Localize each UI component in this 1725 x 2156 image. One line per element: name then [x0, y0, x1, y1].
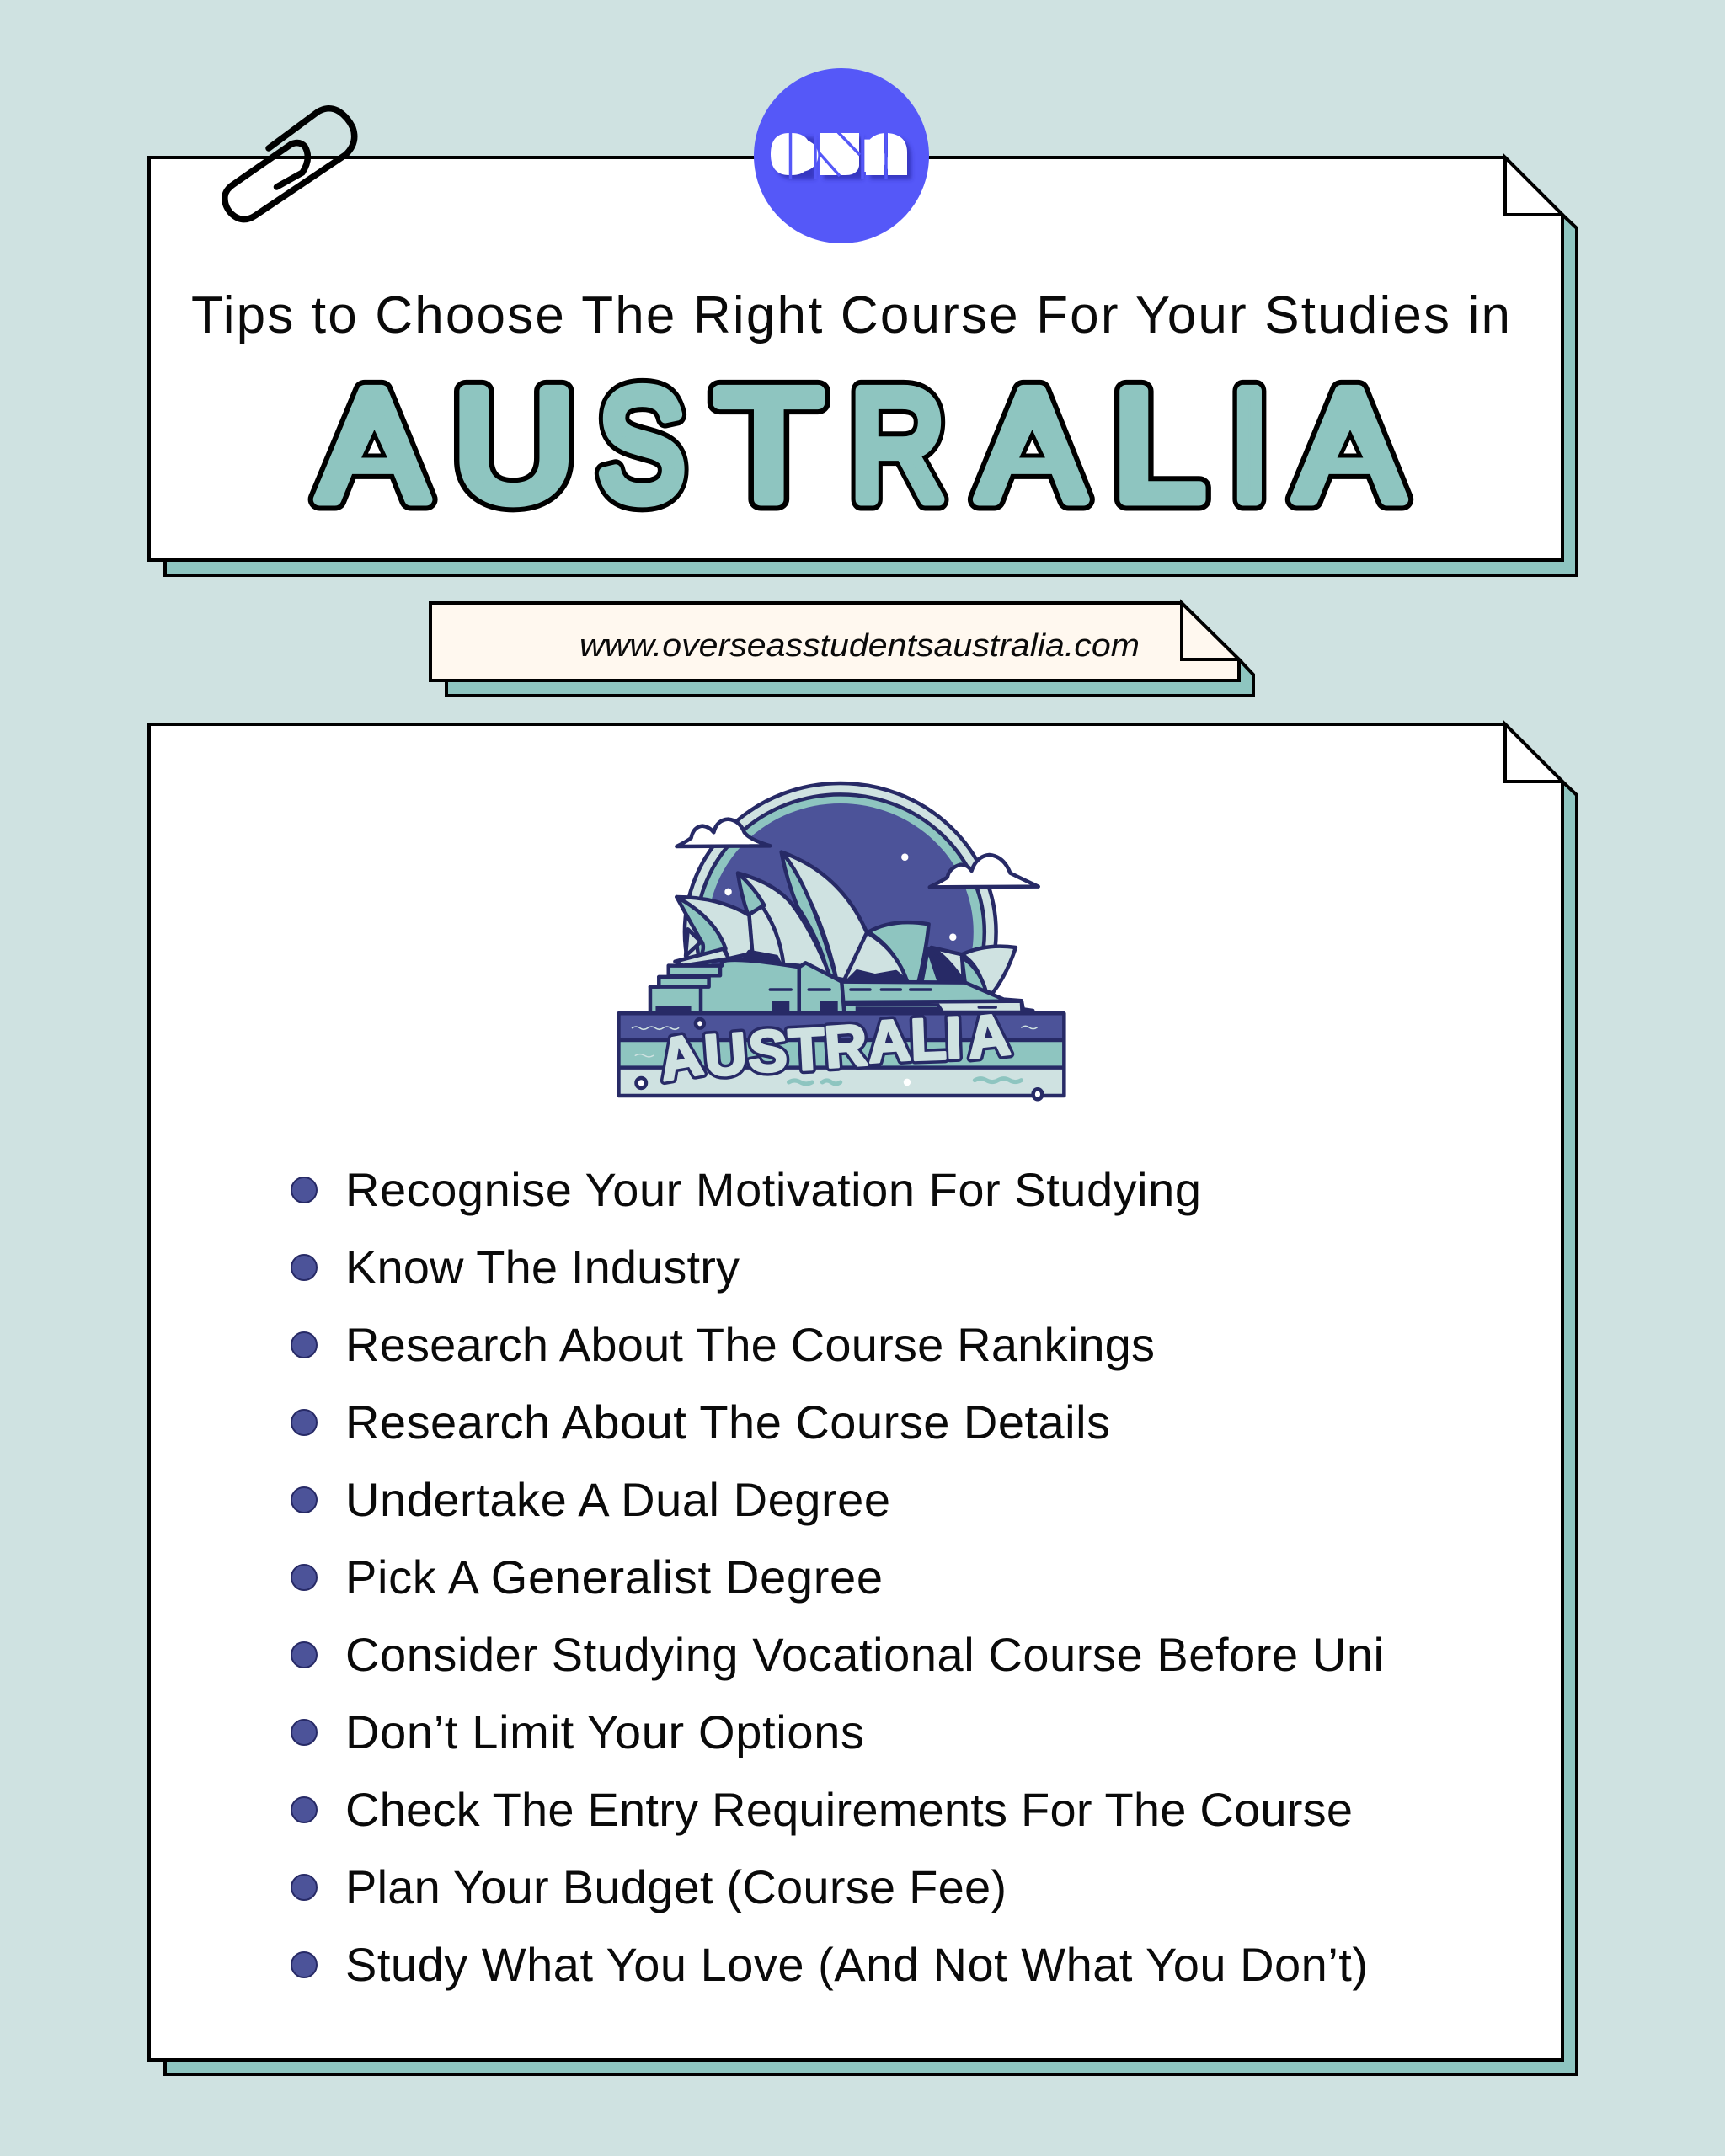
title: AUSTRALIA: I [1230, 357, 1269, 533]
title: AUSTRALIA: A [319, 358, 426, 534]
title: AUSTRALIA: S [598, 357, 686, 533]
tip 6: Pick A Generalist Degree [345, 1550, 883, 1604]
building dashes [770, 990, 996, 1007]
water bands [618, 1013, 1064, 1096]
title: AUSTRALIA: R [850, 357, 945, 533]
title: AUSTRALIA: T [716, 357, 822, 533]
badge lettering [654, 1001, 1013, 1093]
letter A counters [365, 435, 1359, 456]
badge lettering: R [822, 1011, 869, 1081]
title: AUSTRALIA: L [1113, 356, 1204, 533]
badge lettering: S [748, 1018, 788, 1084]
tip 10: Plan Your Budget (Course Fee) [345, 1860, 1007, 1913]
tip 1: Recognise Your Motivation For Studying [345, 1163, 1201, 1216]
title: AUSTRALIA: U [453, 358, 574, 534]
illustration: Sydney Opera House badge [618, 783, 1064, 1099]
tip 8: Don’t Limit Your Options [345, 1705, 864, 1758]
title: AUSTRALIA: A [1296, 357, 1402, 533]
letter A counter patches [357, 413, 1368, 460]
tip 9: Check The Entry Requirements For The Course [345, 1783, 1353, 1836]
badge lettering: I [944, 1005, 963, 1070]
title: AUSTRALIA: T [716, 357, 822, 533]
tip 2: Know The Industry [345, 1241, 740, 1294]
badge lettering: A [654, 1022, 708, 1093]
title: AUSTRALIA: I [1230, 357, 1269, 533]
badge lettering: T [787, 1016, 826, 1083]
panel: header card [149, 157, 1577, 575]
title: AUSTRALIA: A [979, 357, 1084, 533]
badge lettering: A [865, 1006, 912, 1075]
badge lettering: A [964, 1001, 1013, 1071]
title: AUSTRALIA: A [979, 357, 1084, 533]
badge lettering: L [909, 1006, 948, 1073]
clouds [676, 819, 1039, 887]
title: AUSTRALIA [319, 356, 1402, 534]
panel: tips card [149, 724, 1577, 2074]
badge lettering: T [787, 1016, 826, 1083]
tip 3: Research About The Course Rankings [345, 1318, 1155, 1371]
title: AUSTRALIA: R [850, 357, 945, 533]
title: AUSTRALIA: A [319, 358, 426, 534]
building windows [655, 1001, 943, 1013]
building [650, 960, 1033, 1013]
badge lettering: U [702, 1020, 749, 1089]
tip 5: Undertake A Dual Degree [345, 1473, 890, 1526]
tip 11: Study What You Love (And Not What You Don’t) [345, 1938, 1368, 1991]
badge lettering: R [822, 1011, 869, 1081]
waves [633, 1026, 1037, 1084]
subtitle: Tips to Choose The Right Course For Your Studies in [191, 286, 1510, 344]
badge lettering: U [702, 1020, 749, 1089]
title: AUSTRALIA: U [453, 358, 574, 534]
badge lettering: S [748, 1018, 788, 1084]
badge lettering: A [964, 1001, 1013, 1071]
tip 7: Consider Studying Vocational Course Before Uni [345, 1628, 1384, 1681]
title: AUSTRALIA: S [598, 357, 686, 533]
website url: www.overseasstudentsaustralia.com [579, 628, 1140, 664]
logo shadow [775, 137, 911, 179]
panel: website ribbon [430, 603, 1253, 696]
badge lettering: A [865, 1006, 912, 1075]
arch rings [685, 783, 996, 1081]
title: AUSTRALIA: L [1113, 356, 1204, 533]
badge lettering: A [654, 1022, 708, 1093]
list: tips [291, 1163, 1384, 1991]
title: AUSTRALIA: A [1296, 357, 1402, 533]
stars [724, 853, 957, 941]
opera house sails [675, 852, 1016, 993]
badge lettering: I [944, 1005, 963, 1070]
dots [636, 1019, 1042, 1099]
badge lettering: L [909, 1006, 948, 1073]
logo lettering: OSN [774, 129, 904, 182]
logo slits [790, 130, 886, 179]
logo: OSN circle badge [754, 68, 929, 243]
logo blocks [771, 133, 907, 175]
icon: paperclip [225, 109, 355, 220]
tip 4: Research About The Course Details [345, 1396, 1110, 1449]
